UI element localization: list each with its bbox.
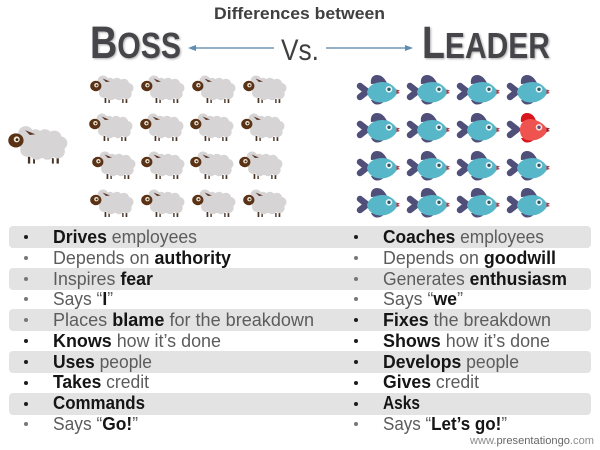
heading: Boss: BOSS [90,17,181,68]
row stripes [9,226,591,415]
list: leader traits: Depends on goodwill [383,248,556,268]
list: boss traits: Inspires fear [53,269,153,289]
fish school [360,75,550,218]
list: boss traits: Depends on authority [53,248,231,268]
list: leader traits: Develops people [383,352,519,372]
arrow: pointing to Leader [326,45,413,51]
list: leader traits: Coaches employees [383,227,544,247]
list: boss traits: Places blame for the breakdown [53,310,314,330]
icon: lone sheep [8,126,67,164]
list: leader traits: Generates enthusiasm [383,269,567,289]
list: boss traits: Uses people [53,352,152,372]
list: leader traits [354,227,567,434]
list: boss traits [24,227,314,434]
arrow: pointing to Boss [188,45,274,51]
list: boss traits: Takes credit [53,372,149,392]
list: leader traits: Shows how it’s done [383,331,550,351]
list: boss traits: Knows how it’s done [53,331,221,351]
list: boss traits: Commands [53,393,145,413]
sheep flock [89,76,286,217]
source credit: www.presentationgo.com [469,435,594,447]
list: leader traits: Gives credit [383,372,479,392]
heading: Leader: LEADER [422,17,550,68]
list: boss traits: Drives employees [53,227,197,247]
heading: Vs.: Vs. [281,34,319,67]
title: Differences between [214,5,385,23]
list: boss traits: Says “I” [53,289,113,309]
list: leader traits: Asks [383,393,420,413]
list: leader traits: Says “Let’s go!” [383,414,507,434]
list: boss traits: Says “Go!” [53,414,138,434]
list: leader traits: Fixes the breakdown [383,310,551,330]
list: leader traits: Says “we” [383,289,463,309]
